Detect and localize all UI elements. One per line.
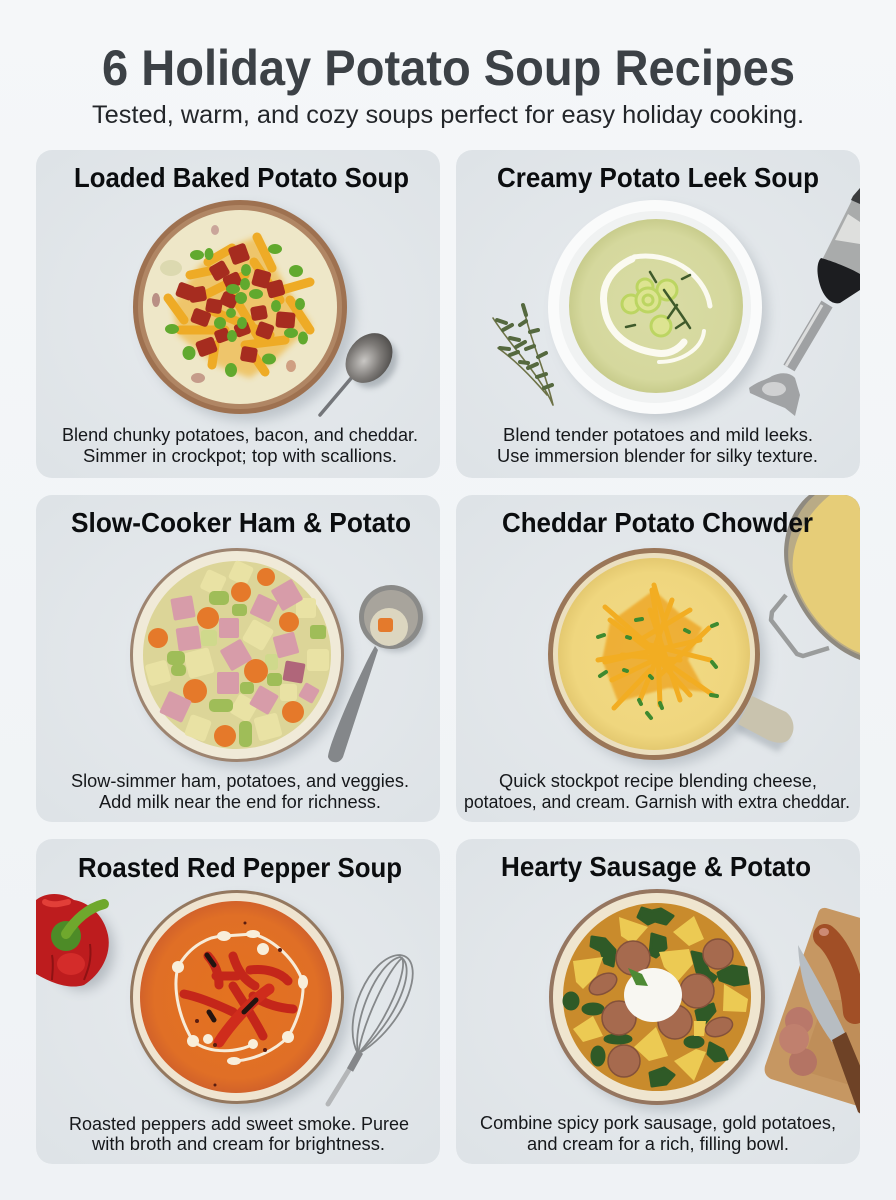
heading: Creamy Potato Leek Soup: Creamy Potato Leek Soup [497, 162, 819, 193]
description [71, 771, 409, 812]
description: and cream for a rich, filling bowl. [527, 1134, 789, 1154]
icon: thyme sprig [493, 305, 553, 405]
icon: loaded potato soup bowl [133, 200, 355, 421]
icon: cutting board with sausage and knife [765, 908, 866, 1118]
description: Roasted peppers add sweet smoke. Puree [69, 1114, 409, 1134]
description: Combine spicy pork sausage, gold potatoes, [480, 1113, 836, 1133]
icon: ladle [328, 585, 426, 762]
heading: Roasted Red Pepper Soup: Roasted Red Pepper Soup [78, 852, 402, 883]
icon: cheddar chowder mug [548, 548, 793, 766]
description: Add milk near the end for richness. [99, 792, 381, 812]
description: Quick stockpot recipe blending cheese, [499, 771, 817, 791]
icon: red bell pepper [36, 894, 114, 990]
panel: Cheddar Potato Chowder [456, 495, 860, 822]
icon: immersion blender [749, 188, 860, 416]
description: potatoes, and cream. Garnish with extra cheddar. [464, 792, 850, 812]
heading: Hearty Sausage & Potato: Hearty Sausage & Potato [501, 851, 811, 882]
description: Blend chunky potatoes, bacon, and cheddar. [62, 425, 418, 445]
panel: Loaded Baked Potato Soup [36, 150, 440, 478]
description [497, 425, 818, 466]
title: 6 Holiday Potato Soup Recipes [102, 40, 795, 96]
description [464, 771, 850, 812]
panel: Hearty Sausage & Potato [456, 839, 866, 1164]
icon: red pepper soup bowl [130, 890, 350, 1110]
panel: Roasted Red Pepper Soup [36, 839, 440, 1164]
panel: Creamy Potato Leek Soup [456, 150, 860, 478]
icon: stockpot [771, 495, 860, 660]
description: Blend tender potatoes and mild leeks. [503, 425, 813, 445]
icon: sausage and potato bowl [549, 889, 771, 1111]
description: Use immersion blender for silky texture. [497, 446, 818, 466]
icon: spoon [320, 324, 407, 415]
description [62, 425, 418, 466]
icon: leek soup bowl [548, 200, 768, 420]
heading: Loaded Baked Potato Soup: Loaded Baked Potato Soup [74, 162, 409, 193]
icon: ham and potato bowl [130, 548, 350, 768]
description [480, 1113, 836, 1154]
heading: Slow-Cooker Ham & Potato: Slow-Cooker Ham & Potato [71, 507, 411, 538]
subtitle: Tested, warm, and cozy soups perfect for easy holiday cooking. [92, 101, 804, 129]
description: Slow-simmer ham, potatoes, and veggies. [71, 771, 409, 791]
description: with broth and cream for brightness. [91, 1134, 385, 1154]
heading: Cheddar Potato Chowder: Cheddar Potato Chowder [502, 507, 813, 538]
description [69, 1114, 409, 1154]
icon: whisk [328, 955, 413, 1104]
panel: Slow-Cooker Ham & Potato [36, 495, 440, 822]
description: Simmer in crockpot; top with scallions. [83, 446, 397, 466]
